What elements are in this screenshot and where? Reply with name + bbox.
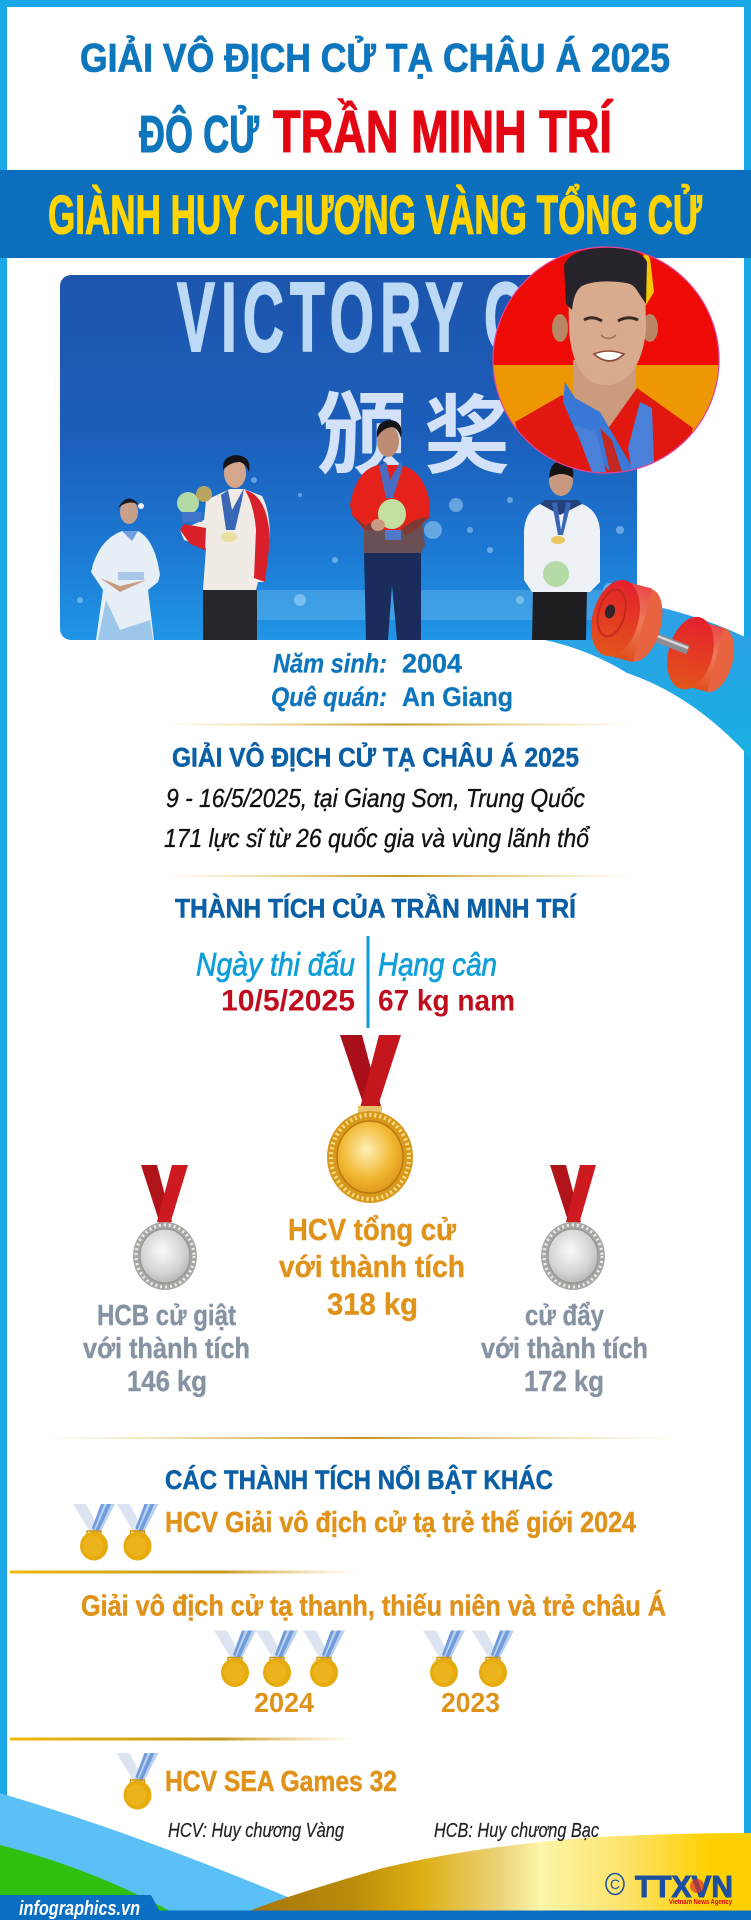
screen text: C [484,262,525,372]
news agency logo: Vietnam News Agency [669,1899,732,1906]
participants: 171 lực sĩ từ 26 quốc gia và vùng lãnh thổ [164,823,590,853]
world junior text: HCV Giải vô địch cử tạ trẻ thế giới 2024 [165,1507,636,1539]
clean and jerk result [481,1300,648,1398]
achievements heading: THÀNH TÍCH CỦA TRẦN MINH TRÍ [175,892,577,924]
blue banner [0,170,751,258]
2024 medals [214,1630,345,1718]
blue swoosh [545,608,751,760]
clean and jerk result: 172 kg [524,1366,604,1398]
title line 2 prefix: ĐÔ CỬ [139,105,260,164]
podium photo: 颁 [316,362,406,492]
competition day and weight class [196,936,515,1028]
athlete portrait [493,247,719,478]
screen text: VICTORY [177,262,469,372]
snatch result: HCB cử giật [97,1300,236,1332]
news agency logo: TTXVN [635,1869,733,1904]
gold wave [249,1833,751,1911]
presenter [91,498,160,640]
silver medal: clean and jerk [541,1165,605,1290]
athlete details: 2004 [402,648,462,678]
world junior medals [73,1504,158,1560]
total result: 318 kg [327,1286,418,1322]
championship heading: GIẢI VÔ ĐỊCH CỬ TẠ CHÂU Á 2025 [172,740,579,772]
legend [168,1820,599,1842]
dumbbell bar [652,636,688,650]
snatch result: với thành tích [83,1333,250,1365]
title block [80,34,670,165]
footer background [0,1793,751,1920]
legend: HCV: Huy chương Vàng [168,1820,344,1842]
total result: với thành tích [279,1249,465,1284]
asian youth championship text: Giải vô địch cử tạ thanh, thiếu niên và trẻ châu Á [81,1588,666,1622]
competition day and weight class: 67 kg nam [378,984,515,1018]
medal ribbons [563,382,635,478]
athlete details: An Giang [402,682,513,712]
title line 1: GIẢI VÔ ĐỊCH CỬ TẠ CHÂU Á 2025 [80,34,670,80]
bronze medalist [524,461,600,640]
hometown: Quê quán: [271,682,387,712]
2023 medals [423,1630,514,1718]
gold medalist [350,420,430,640]
championship info [164,740,590,853]
silver medalist [177,455,270,640]
light blue wave [0,1793,290,1912]
gold medal [327,1035,413,1203]
face [568,281,646,385]
dumbbell plate right [660,612,742,700]
sea games medal [116,1753,158,1810]
hair [564,248,647,310]
clean and jerk result: với thành tích [481,1333,648,1365]
green wave [0,1845,172,1912]
legend: HCB: Huy chương Bạc [434,1820,599,1842]
athlete details [271,648,513,712]
athlete name: TRẦN MINH TRÍ [273,99,613,165]
podium photo: 奖 [424,366,510,491]
screen text [176,281,518,353]
news agency logo: C [610,1876,620,1892]
total result [279,1212,465,1322]
other achievements heading: CÁC THÀNH TÍCH NỔI BẬT KHÁC [165,1464,553,1495]
neck [573,360,636,430]
jacket [515,388,693,475]
website tab [0,1895,160,1912]
snatch result: 146 kg [127,1366,207,1398]
podium photo [60,262,637,640]
snatch result [83,1300,250,1398]
total result: HCV tổng cử [288,1212,456,1247]
competition day and weight class: Hạng cân [378,946,497,982]
2023 label: 2023 [441,1687,500,1718]
website credit: infographics.vn [19,1898,140,1920]
sea games text: HCV SEA Games 32 [165,1766,397,1798]
clean and jerk result: cử đẩy [525,1300,604,1332]
2024 label: 2024 [254,1687,314,1718]
dumbbell plate left [583,574,670,668]
competition day and weight class: Ngày thi đấu [196,946,355,982]
birth year: Năm sinh: [273,648,387,678]
dumbbell and swoosh [545,574,751,760]
dates and venue: 9 - 16/5/2025, tại Giang Sơn, Trung Quốc [166,783,585,813]
silver medal: snatch [133,1165,197,1290]
bottom bar [0,1910,751,1920]
competition day and weight class: 10/5/2025 [221,984,355,1018]
